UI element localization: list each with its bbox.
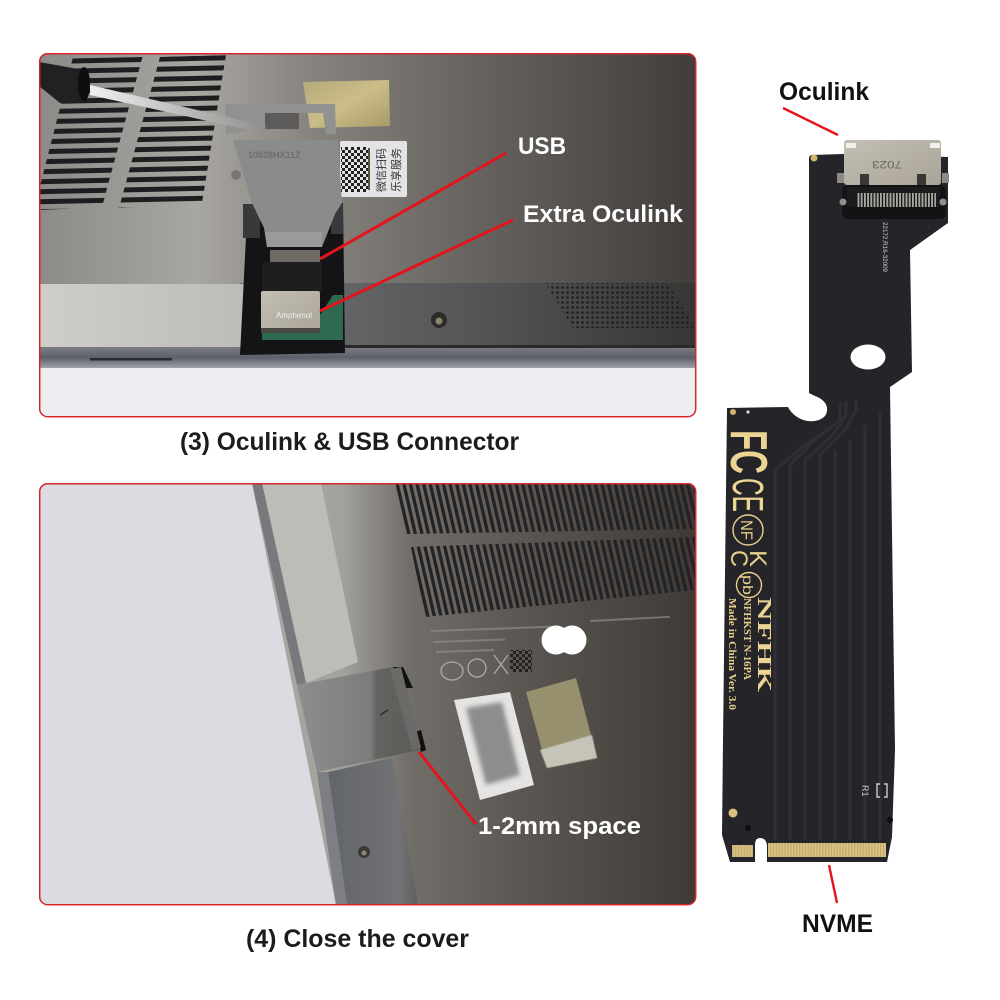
oculink socket xyxy=(837,140,949,219)
vent slots upper xyxy=(394,483,696,534)
caption: step 3: (3) Oculink & USB Connector xyxy=(180,428,519,456)
logo: Pb circle: pb xyxy=(740,575,756,595)
line: Extra Oculink xyxy=(320,220,513,311)
green board xyxy=(262,295,343,340)
logo: KC: K xyxy=(744,550,771,567)
vent slots middle xyxy=(119,55,226,208)
nvme gold contacts xyxy=(732,843,886,857)
gold sticker xyxy=(526,678,597,768)
grey plastic cover xyxy=(225,104,342,247)
panel: oculink and USB connector photo xyxy=(39,53,696,418)
label: Extra Oculink: Extra Oculink xyxy=(523,201,684,228)
logo: NF circle xyxy=(733,515,763,545)
pcb outline xyxy=(722,154,948,862)
regulatory small text lines xyxy=(431,616,670,653)
QR service label xyxy=(340,141,407,197)
line: NVME xyxy=(829,865,837,903)
logo: NF circle: NF xyxy=(737,520,756,540)
brand: NFHK: NFHK xyxy=(753,597,775,693)
model text: NFHKST N-16PA xyxy=(741,598,753,680)
laptop light side edge xyxy=(262,483,358,683)
certification marks xyxy=(441,650,532,680)
blurred white sticker xyxy=(454,692,534,800)
QR service label: 微信扫码 xyxy=(374,148,388,192)
light background xyxy=(39,483,336,904)
silk print code: 22172,R16-32009 xyxy=(881,222,887,273)
label: Oculink: Oculink xyxy=(779,78,869,106)
oculink socket: 7023 xyxy=(872,158,902,170)
screwdriver xyxy=(39,62,266,133)
gold dots and vias xyxy=(728,154,893,831)
screw xyxy=(431,312,447,328)
logo: KC: C xyxy=(725,550,752,567)
line: space xyxy=(419,752,476,824)
gold sticker xyxy=(303,80,390,128)
vent slots lower xyxy=(411,537,696,617)
line: Oculink xyxy=(783,108,838,135)
oculink connector: Amphenol xyxy=(276,311,312,320)
label: NVME: NVME xyxy=(802,910,873,938)
vent slots left xyxy=(39,55,143,210)
laptop underside background xyxy=(39,53,695,284)
adapter board xyxy=(719,140,949,862)
hinge cover xyxy=(297,667,426,772)
white hole xyxy=(542,626,586,654)
logo: CE: CE xyxy=(723,478,772,512)
connector bay xyxy=(240,203,345,355)
USB connector xyxy=(262,250,322,291)
silk: component outline xyxy=(877,784,887,797)
laptop underside xyxy=(252,483,696,905)
label: 1-2mm space: 1-2mm space xyxy=(478,813,641,840)
label: USB: USB xyxy=(518,133,566,160)
oculink connector xyxy=(261,291,320,333)
screw xyxy=(358,846,370,858)
silk: R1: R1 xyxy=(860,785,870,797)
logo: KC xyxy=(725,550,771,567)
perforated speaker grille xyxy=(545,283,696,328)
mounting hole xyxy=(850,344,886,370)
logo: FC: FC xyxy=(719,430,777,474)
line: USB xyxy=(320,153,506,259)
QR service label: 乐享服务 xyxy=(389,148,403,192)
grey plastic cover: 10538HX11Z xyxy=(248,150,301,160)
made in china text: Made in China Ver. 3.0 xyxy=(726,598,738,711)
panel: close the cover photo xyxy=(39,483,696,905)
flexible cover hinges xyxy=(243,204,260,238)
caption: step 4: (4) Close the cover xyxy=(246,925,469,953)
logo: Pb circle xyxy=(736,572,762,598)
pcb traces xyxy=(775,400,880,840)
lower chassis section xyxy=(328,758,418,905)
